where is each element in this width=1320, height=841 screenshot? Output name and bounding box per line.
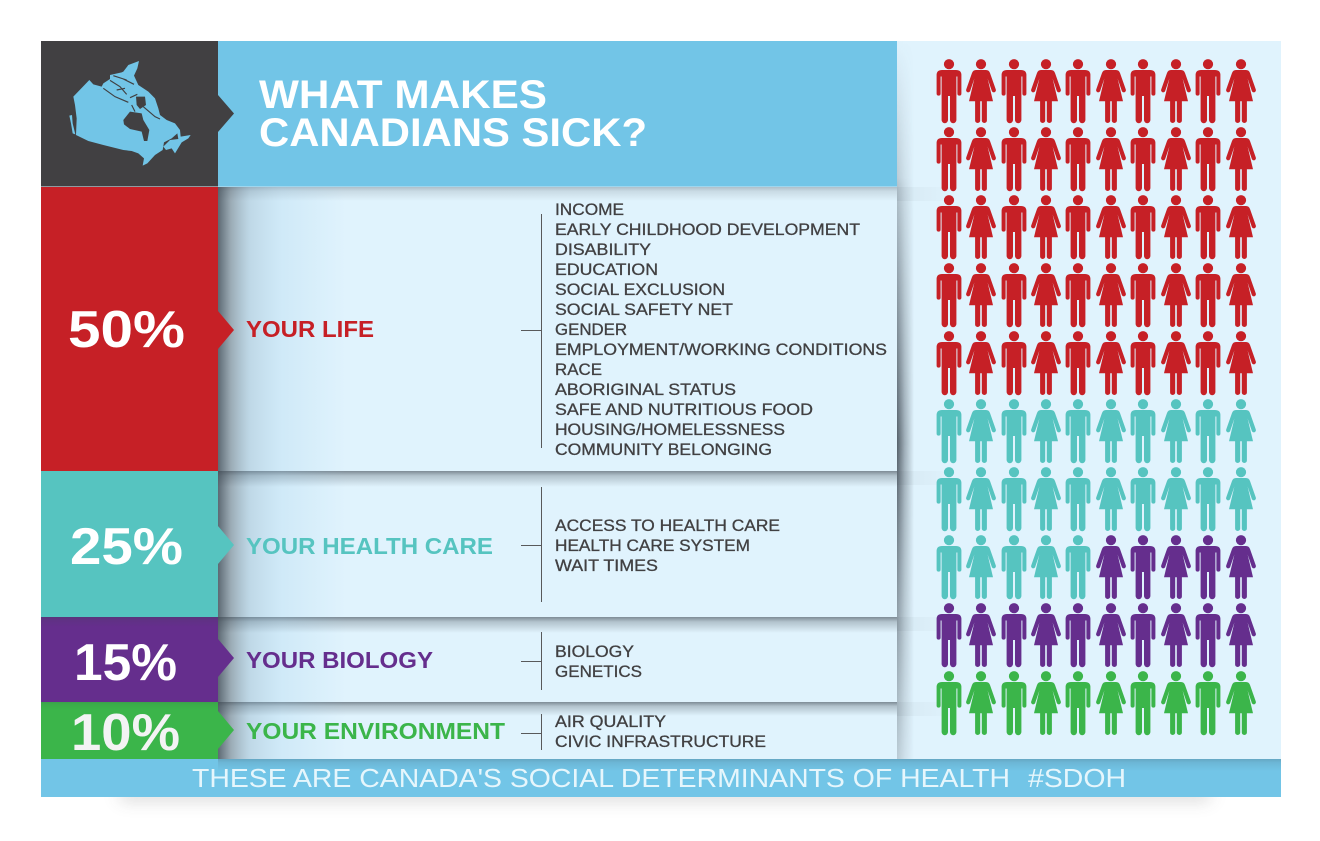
list: your life factors: RACE bbox=[555, 361, 602, 379]
list: your life factors: SOCIAL SAFETY NET bbox=[555, 301, 733, 319]
list: biology factors: BIOLOGY bbox=[555, 643, 634, 661]
bracket bbox=[521, 214, 542, 448]
red percentage tab: 50% bbox=[68, 301, 185, 359]
panel: your life bbox=[41, 187, 887, 471]
panel: your health care bbox=[41, 471, 780, 617]
list: your life factors: SAFE AND NUTRITIOUS FOOD bbox=[555, 401, 813, 419]
list: your life factors bbox=[555, 201, 887, 459]
heading: your biology: YOUR BIOLOGY bbox=[246, 647, 433, 673]
list: your life factors: SOCIAL EXCLUSION bbox=[555, 281, 725, 299]
title: WHAT MAKES bbox=[259, 73, 547, 117]
list: health care factors bbox=[555, 517, 780, 575]
bracket bbox=[521, 714, 542, 750]
teal percentage tab bbox=[41, 471, 234, 617]
list: your life factors: COMMUNITY BELONGING bbox=[555, 441, 772, 459]
icon: map of Canada bbox=[69, 61, 191, 166]
heading: your environment: YOUR ENVIRONMENT bbox=[246, 718, 505, 744]
list: health care factors: HEALTH CARE SYSTEM bbox=[555, 537, 750, 555]
heading: your life: YOUR LIFE bbox=[246, 316, 374, 342]
figures: 50 red, your life bbox=[937, 59, 1256, 395]
teal percentage tab: 25% bbox=[70, 518, 183, 576]
panel: your biology bbox=[41, 617, 642, 702]
bracket bbox=[521, 632, 542, 690]
figures: 10 green, your environment bbox=[937, 671, 1256, 735]
footer banner: THESE ARE CANADA'S SOCIAL DETERMINANTS OF HEALTH bbox=[192, 763, 1010, 793]
footer banner bbox=[41, 759, 1281, 797]
list: biology factors: GENETICS bbox=[555, 663, 642, 681]
list: environment factors: AIR QUALITY bbox=[555, 713, 666, 731]
pictogram: 100 people bbox=[937, 59, 1256, 735]
heading: your health care: YOUR HEALTH CARE bbox=[246, 533, 493, 559]
panel: title banner bbox=[218, 41, 897, 186]
list: environment factors: CIVIC INFRASTRUCTURE bbox=[555, 733, 766, 751]
list: your life factors: INCOME bbox=[555, 201, 624, 219]
list: your life factors: DISABILITY bbox=[555, 241, 651, 259]
green percentage tab: 10% bbox=[71, 704, 180, 762]
list: your life factors: EARLY CHILDHOOD DEVELOPMENT bbox=[555, 221, 860, 239]
figures: 25 teal, your health care bbox=[937, 399, 1256, 599]
purple percentage tab bbox=[41, 617, 234, 702]
list: biology factors bbox=[555, 643, 642, 681]
list: your life factors: HOUSING/HOMELESSNESS bbox=[555, 421, 785, 439]
title: CANADIANS SICK? bbox=[259, 111, 647, 155]
list: environment factors bbox=[555, 713, 766, 751]
bracket bbox=[521, 487, 542, 602]
panel: map block bbox=[41, 41, 234, 186]
footer banner: #SDOH bbox=[1028, 763, 1126, 793]
figures: 15 purple, your biology bbox=[937, 535, 1256, 667]
band shadows bbox=[218, 41, 957, 759]
list: health care factors: ACCESS TO HEALTH CARE bbox=[555, 517, 780, 535]
green percentage tab bbox=[41, 702, 234, 762]
title bbox=[259, 73, 647, 155]
list: health care factors: WAIT TIMES bbox=[555, 557, 658, 575]
purple percentage tab: 15% bbox=[74, 634, 177, 692]
list: your life factors: EMPLOYMENT/WORKING CONDITIONS bbox=[555, 341, 887, 359]
red percentage tab bbox=[41, 187, 234, 471]
list: your life factors: EDUCATION bbox=[555, 261, 658, 279]
panel: your environment bbox=[41, 702, 766, 762]
drop shadow under the panel bbox=[120, 786, 1210, 800]
list: your life factors: GENDER bbox=[555, 321, 627, 339]
list: your life factors: ABORIGINAL STATUS bbox=[555, 381, 736, 399]
